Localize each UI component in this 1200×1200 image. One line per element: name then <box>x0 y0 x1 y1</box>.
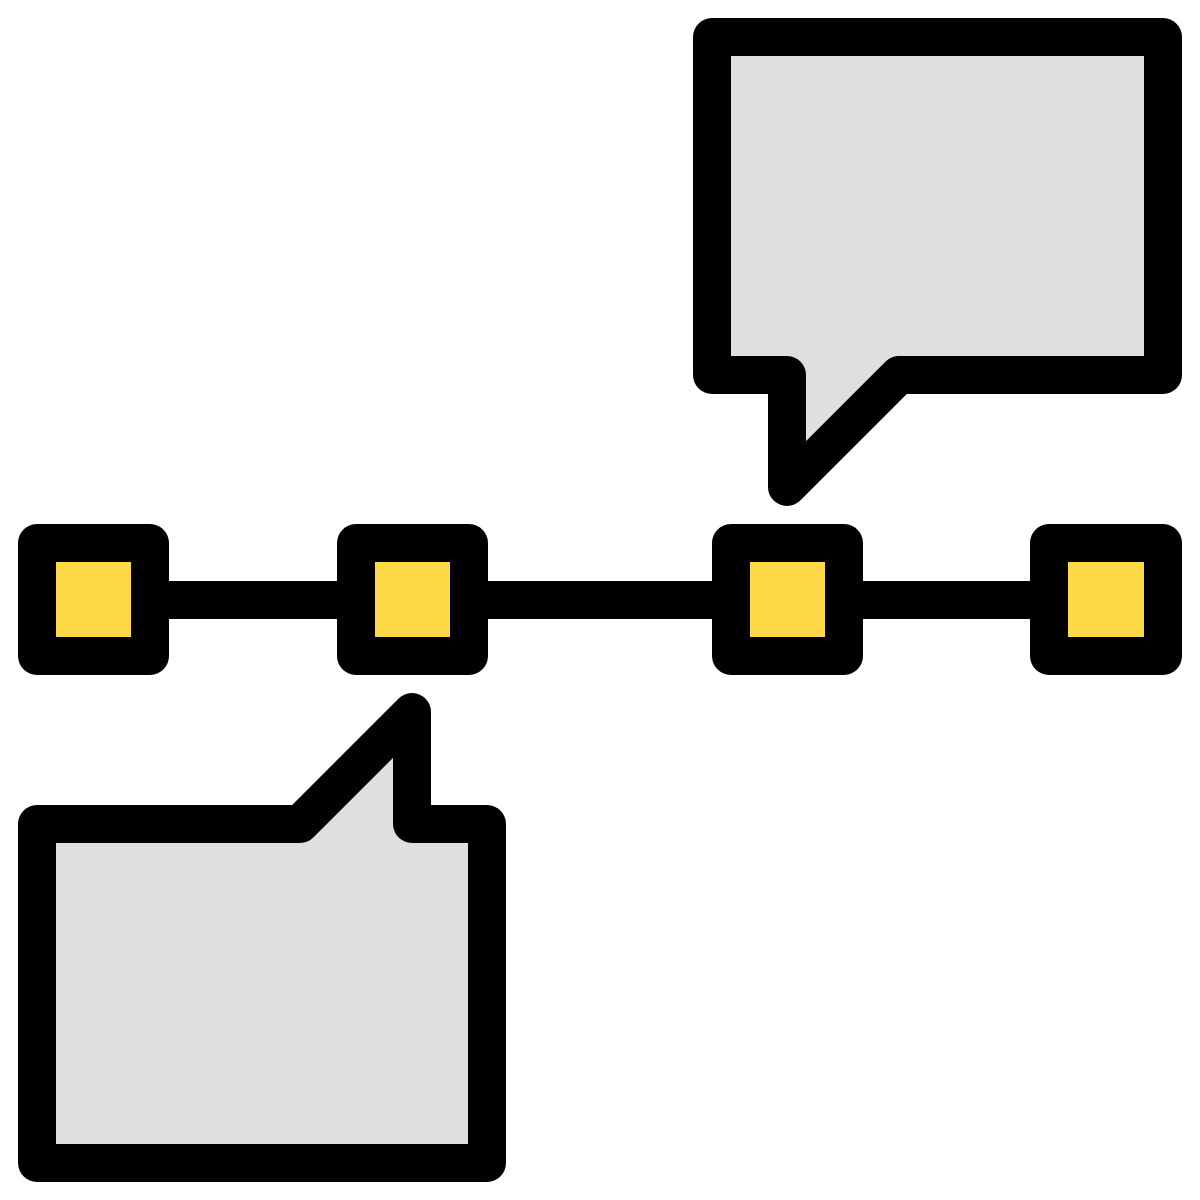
callout: top right bubble <box>712 37 1163 487</box>
node 1 <box>37 543 150 656</box>
connecting line <box>150 581 1049 619</box>
callout: bottom left bubble <box>37 712 487 1163</box>
node 3 <box>731 543 844 656</box>
node 4 <box>1049 543 1163 656</box>
node 2 <box>356 543 469 656</box>
